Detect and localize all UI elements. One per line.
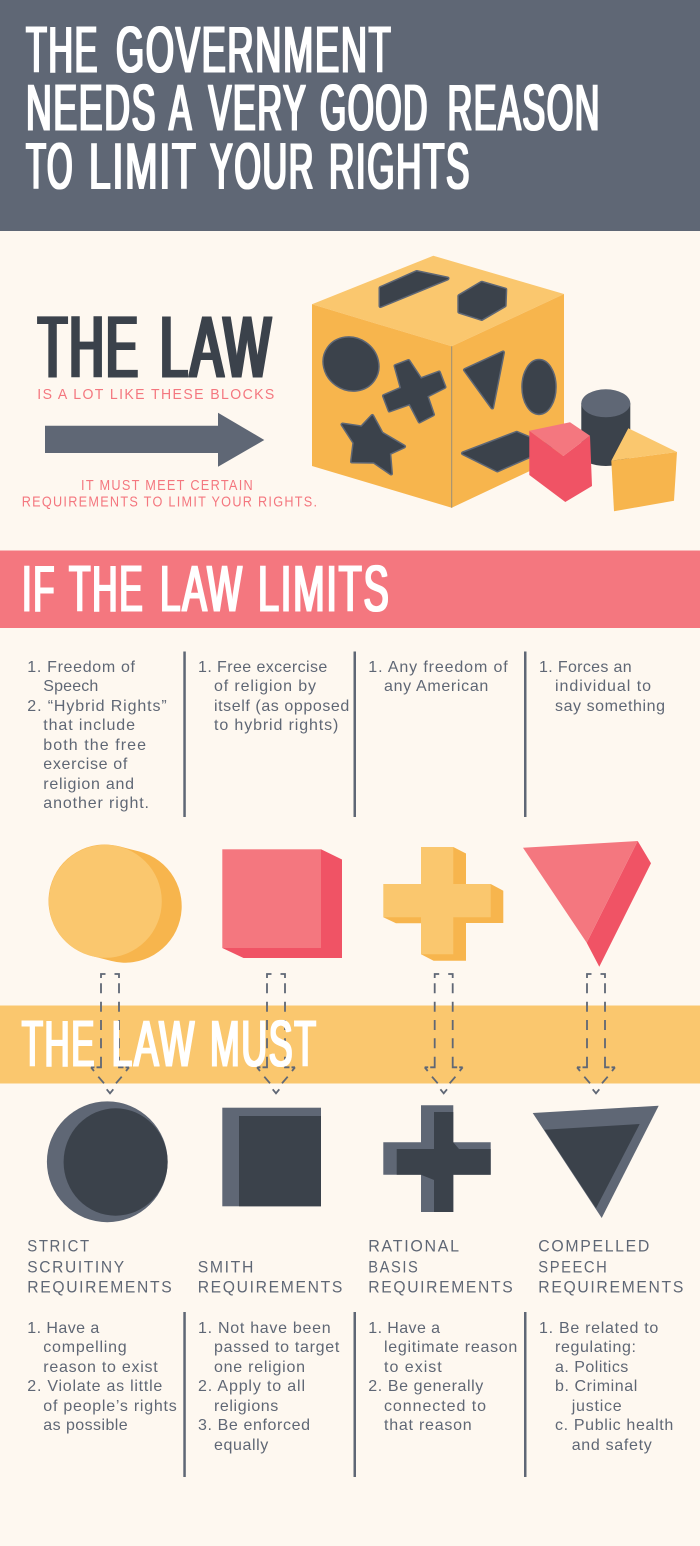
text: rational basis list: to exist <box>384 1359 442 1376</box>
text: compelled speech list: a. Politics <box>555 1359 628 1376</box>
title: GOOD <box>320 71 429 144</box>
icon: dark circle slot <box>47 1101 168 1222</box>
label: strict scrutiny: REQUIREMENTS <box>27 1278 173 1297</box>
label: strict scrutiny <box>27 1237 173 1297</box>
text: rational basis list: 1. Have a <box>368 1320 440 1337</box>
heading: the law must: LAW <box>112 1007 196 1080</box>
text: smith list: 1. Not have been <box>198 1320 331 1337</box>
text: column 4 rights: individual to <box>555 678 651 695</box>
text: rational basis list: connected to <box>384 1398 486 1415</box>
label: smith: SMITH <box>198 1257 255 1276</box>
label: strict scrutiny: STRICT <box>27 1237 91 1256</box>
label: compelled speech <box>538 1237 685 1297</box>
text: rational basis list: legitimate reason <box>384 1339 517 1356</box>
text: compelled speech list <box>539 1320 673 1454</box>
heading: the law: LAW <box>160 299 273 396</box>
arrow: circle to strict scrutiny <box>91 974 129 1093</box>
text: column 2 rights: to hybrid rights) <box>214 717 338 734</box>
text: column 4 rights: 1. Forces an <box>539 659 632 676</box>
text: compelled speech list: justice <box>571 1398 622 1415</box>
title: GOVERNMENT <box>116 13 392 86</box>
text: column 4 rights: say something <box>555 698 665 715</box>
title: NEEDS <box>26 71 157 144</box>
text: strict scrutiny list <box>27 1320 177 1434</box>
panel: the law must banner <box>0 1006 700 1084</box>
icon: yellow cross block <box>383 847 503 961</box>
text: strict scrutiny list: as possible <box>43 1417 128 1434</box>
title: LIMIT <box>89 130 198 202</box>
title: RIGHTS <box>329 130 471 202</box>
text: rational basis list <box>368 1320 517 1434</box>
text: smith list: 3. Be enforced <box>198 1417 310 1434</box>
label: compelled speech: COMPELLED <box>538 1237 651 1256</box>
text: smith list: religions <box>214 1398 278 1415</box>
text: rational basis list: 2. Be generally <box>368 1378 483 1395</box>
text: compelled speech list: and safety <box>572 1437 652 1454</box>
arrow: triangle to compelled speech <box>577 974 615 1093</box>
text: column 1 rights: Speech <box>43 678 98 695</box>
panel: the law intro <box>22 256 677 511</box>
text: strict scrutiny list: compelling <box>43 1339 127 1356</box>
heading: if the law limits <box>22 552 390 625</box>
heading: the law: THE <box>38 299 140 396</box>
title: VERY <box>208 71 308 144</box>
arrow: square to smith <box>257 974 295 1093</box>
text: column 1 rights: religion and <box>43 776 134 793</box>
text: column 2 rights: itself (as opposed <box>214 698 349 715</box>
label: rational basis: RATIONAL <box>368 1237 461 1256</box>
label: rational basis <box>368 1237 514 1297</box>
panel: title banner <box>0 0 700 231</box>
text: smith list: one religion <box>214 1359 305 1376</box>
panel: rights columns <box>27 652 665 817</box>
text: strict scrutiny list: 2. Violate as little <box>27 1378 162 1395</box>
text: strict scrutiny list: 1. Have a <box>27 1320 99 1337</box>
text: column 1 rights: both the free <box>43 737 146 754</box>
title: TO <box>26 130 74 202</box>
text: requirements note <box>22 477 318 511</box>
label: smith <box>198 1257 344 1297</box>
text: column 2 rights <box>198 659 349 734</box>
text: rational basis list: that reason <box>384 1417 472 1434</box>
panel: if the law limits banner <box>0 550 700 628</box>
heading: the law must: THE <box>22 1007 96 1080</box>
title: THE <box>26 13 99 86</box>
text: column 1 rights <box>27 659 167 812</box>
text: requirements note: IT MUST MEET CERTAIN <box>81 477 254 494</box>
text: column 1 rights: another right. <box>43 795 149 812</box>
text: column 2 rights: of religion by <box>214 678 316 695</box>
heading: the law must <box>22 1007 318 1080</box>
icon: pink square block <box>222 849 342 958</box>
text: compelled speech list: b. Criminal <box>555 1378 637 1395</box>
title: A <box>169 71 193 144</box>
heading: if the law limits: LIMITS <box>258 552 390 625</box>
heading: if the law limits: LAW <box>160 552 244 625</box>
title: YOUR <box>210 130 315 202</box>
text: smith list: passed to target <box>214 1339 340 1356</box>
label: rational basis: BASIS <box>368 1257 419 1276</box>
label: smith: REQUIREMENTS <box>198 1278 344 1297</box>
text: compelled speech list: c. Public health <box>555 1417 673 1434</box>
icon: yellow cylinder block <box>49 845 162 958</box>
icon: shape sorter cube with blocks <box>312 256 677 511</box>
text: smith list: equally <box>214 1437 268 1454</box>
text: compelled speech list: regulating: <box>555 1339 636 1356</box>
text: column 1 rights: 2. “Hybrid Rights” <box>27 698 167 715</box>
label: compelled speech: REQUIREMENTS <box>538 1278 685 1297</box>
icon: pink triangle block <box>523 841 651 967</box>
text: column 2 rights: 1. Free excercise <box>198 659 327 676</box>
text: requirements note: REQUIREMENTS TO LIMIT YOUR RIGHTS. <box>22 494 318 511</box>
text: smith list <box>198 1320 340 1454</box>
arrow: pointing to blocks <box>45 413 264 467</box>
text: column 1 rights: that include <box>43 717 135 734</box>
panel: requirement labels <box>27 1237 685 1297</box>
icon: dark square slot <box>222 1108 321 1206</box>
text: strict scrutiny list: of people’s rights <box>43 1398 177 1415</box>
panel: requirement lists <box>27 1312 673 1477</box>
icon: dark triangle slot <box>533 1106 659 1218</box>
label: compelled speech: SPEECH <box>538 1257 608 1276</box>
icon: dark cross slot <box>383 1105 491 1212</box>
title <box>26 13 601 202</box>
text: compelled speech list: 1. Be related to <box>539 1320 658 1337</box>
heading: the law must: MUST <box>210 1007 318 1080</box>
text: smith list: 2. Apply to all <box>198 1378 305 1395</box>
subheading: blocks comparison: IS A LOT LIKE THESE BLOCKS <box>37 386 276 403</box>
text: column 4 rights <box>539 659 665 715</box>
text: strict scrutiny list: reason to exist <box>43 1359 158 1376</box>
heading: if the law limits: IF <box>22 552 56 625</box>
heading: if the law limits: THE <box>69 552 144 625</box>
text: column 1 rights: exercise of <box>43 756 128 773</box>
text: column 3 rights: any American <box>384 678 488 695</box>
text: column 3 rights <box>368 659 508 695</box>
arrow: cross to rational basis <box>425 974 463 1093</box>
text: column 1 rights: 1. Freedom of <box>27 659 136 676</box>
label: strict scrutiny: SCRUITINY <box>27 1257 126 1276</box>
text: column 3 rights: 1. Any freedom of <box>368 659 508 676</box>
label: rational basis: REQUIREMENTS <box>368 1278 514 1297</box>
